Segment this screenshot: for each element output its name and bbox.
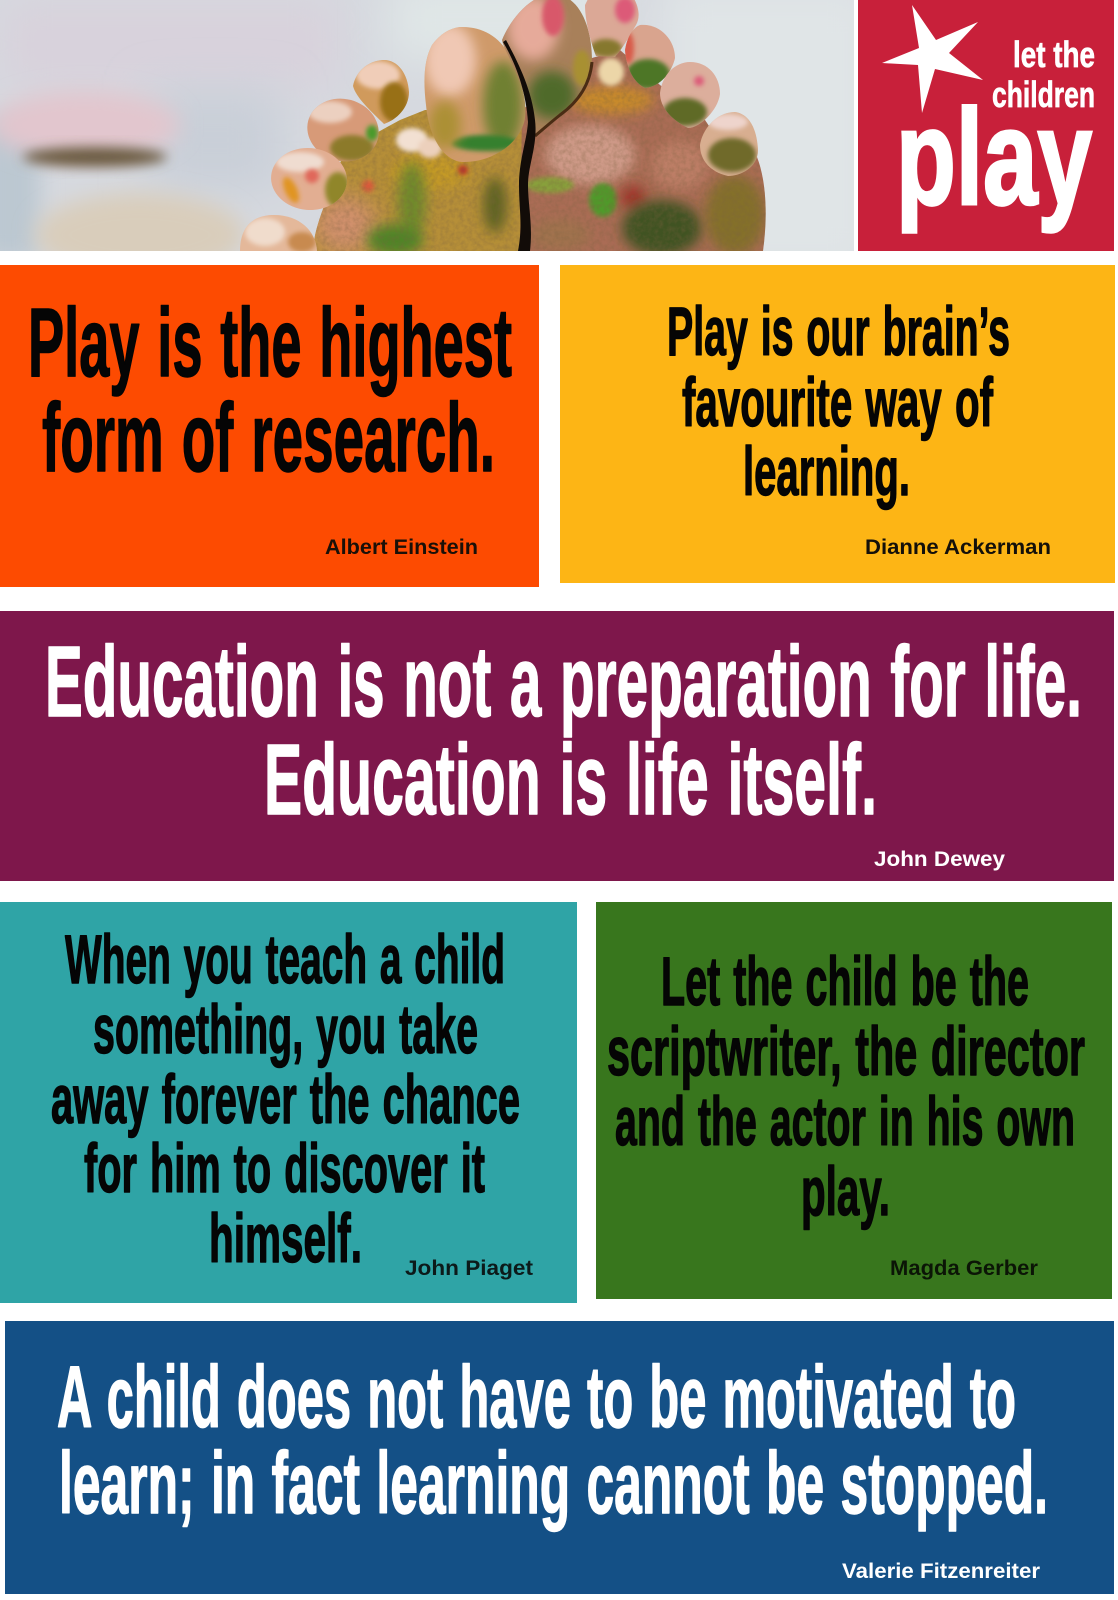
- big toe, left foot: [424, 27, 526, 162]
- fifth toe, left foot: [240, 215, 317, 251]
- panel: Dianne Ackerman quote: [560, 265, 1115, 583]
- second toe, right foot: [585, 0, 639, 57]
- logo: let the children play: [858, 0, 1114, 251]
- attribution: Valerie Fitzenreiter: [842, 1559, 1041, 1583]
- quote text: something, you take: [93, 991, 478, 1068]
- logo text: let the: let the: [1013, 34, 1095, 75]
- third toe, left foot: [307, 98, 379, 162]
- quote text: [667, 293, 1010, 510]
- quote text: Play is the highest: [28, 288, 512, 397]
- quote text: for him to discover it: [84, 1130, 485, 1207]
- attribution: John Dewey: [874, 847, 1005, 871]
- quote text: [607, 943, 1085, 1230]
- panel: Valerie Fitzenreiter quote: [5, 1321, 1114, 1594]
- right foot sole: [515, 50, 775, 260]
- second toe, left foot: [353, 60, 409, 124]
- attribution: John Piaget: [405, 1256, 533, 1280]
- panel: Magda Gerber quote: [596, 902, 1112, 1299]
- attribution: Dianne Ackerman: [865, 535, 1051, 559]
- quote text: himself.: [209, 1200, 362, 1277]
- quote text: learning.: [743, 433, 910, 510]
- fifth toe, right foot: [700, 112, 758, 176]
- left foot sole: [314, 110, 522, 251]
- fourth toe, right foot: [660, 62, 720, 128]
- header photo: muddy painted feet: [0, 0, 854, 251]
- crack between feet: [503, 40, 536, 251]
- panel: Albert Einstein quote: [0, 265, 539, 587]
- shadow under right big toe: [535, 62, 592, 136]
- skin texture on feet: [316, 55, 764, 251]
- big toe, right foot: [502, 0, 592, 133]
- icon: white star: [882, 5, 983, 113]
- blurred photo background: [0, 0, 854, 251]
- panel: John Dewey quote: [0, 611, 1114, 881]
- quote text: When you teach a child: [65, 921, 505, 998]
- quote text: [28, 288, 512, 492]
- quote text: [57, 1349, 1048, 1532]
- fourth toe, left foot: [271, 148, 347, 210]
- quote text: [45, 626, 1082, 836]
- attribution: Albert Einstein: [325, 535, 478, 559]
- quote text: form of research.: [42, 383, 495, 492]
- pale skin between the toes: [396, 58, 624, 158]
- panel: John Piaget quote: [0, 902, 577, 1303]
- quote text: play.: [801, 1153, 890, 1230]
- quote text: [51, 921, 520, 1277]
- attribution: Magda Gerber: [890, 1256, 1039, 1280]
- quote text: away forever the chance: [51, 1061, 520, 1138]
- third toe, right foot: [625, 24, 675, 88]
